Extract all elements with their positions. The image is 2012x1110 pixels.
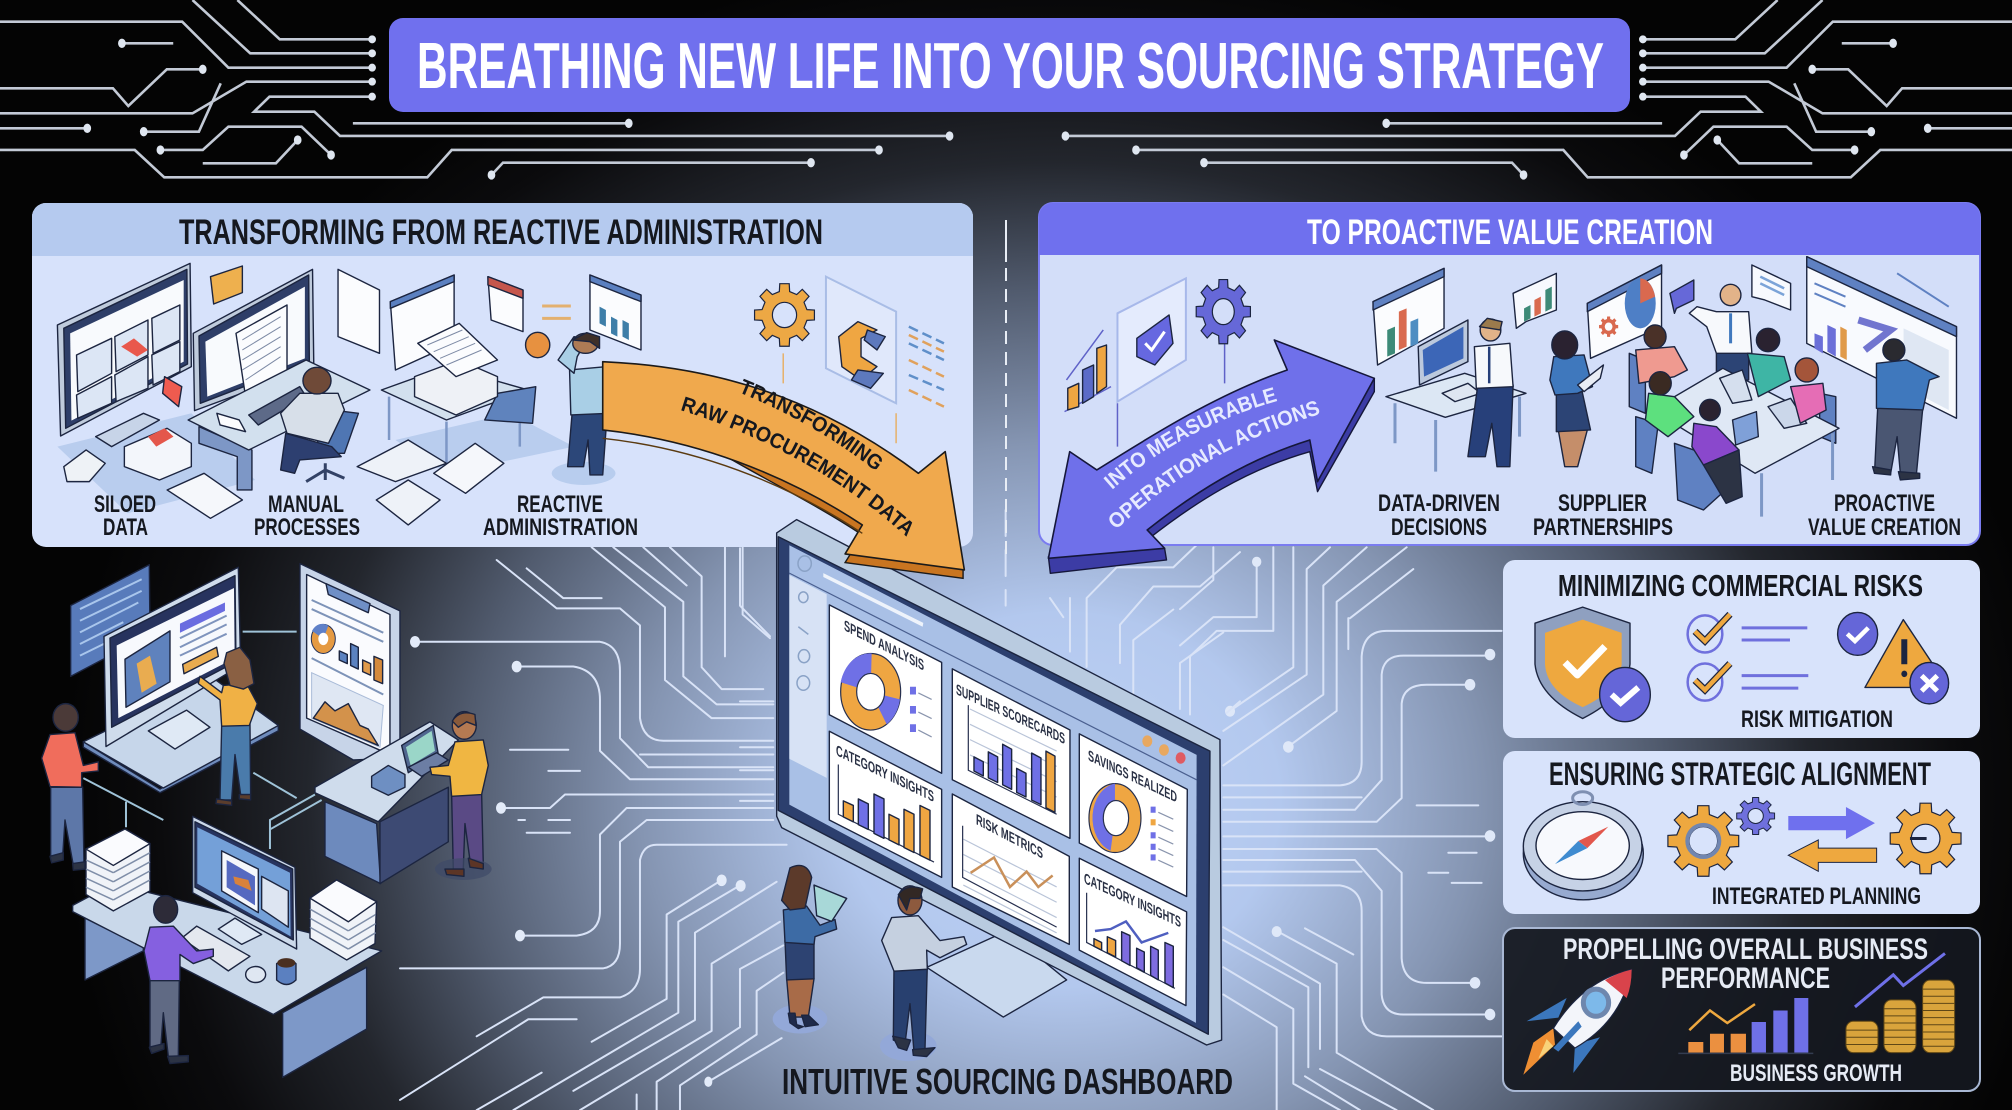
person: analyst: [1468, 318, 1513, 467]
purple gear: [1196, 280, 1250, 344]
arrow: raw procurement data: [602, 360, 966, 580]
growth arrow: [1855, 953, 1945, 1007]
pie chart screen: [1587, 265, 1662, 358]
arrow text line two: OPERATIONAL ACTIONS: [1109, 401, 1320, 527]
exchange arrows: [1788, 807, 1877, 871]
gears: [1668, 797, 1961, 876]
card: category insights 2: [1079, 858, 1187, 1006]
scene: analysts at workstations: [42, 564, 492, 1077]
title: savings realized: SAVINGS REALIZED: [1088, 748, 1177, 807]
centre dashed divider: [1005, 220, 1007, 262]
coin stacks: [1846, 980, 1955, 1053]
label: intuitive sourcing dashboard: INTUITIVE SOURCING DASHBOARD: [782, 1061, 1233, 1102]
compass: [1523, 792, 1643, 900]
card: spend analysis: [829, 605, 942, 773]
checklist card: [1117, 278, 1186, 402]
shield: [1535, 607, 1630, 719]
envelope: [210, 266, 242, 304]
person: presenter: [1689, 284, 1752, 382]
illustration: data driven team: [1065, 257, 1956, 517]
growth chart: [1065, 330, 1225, 447]
title: supplier scorecards: SUPPLIER SCORECARDS: [956, 682, 1065, 748]
panel header band: [1039, 203, 1980, 255]
analytics screen: [1373, 268, 1444, 365]
label: integrated planning: INTEGRATED PLANNING: [1712, 883, 1921, 910]
card titles: [836, 618, 1181, 931]
circuit traces: centre left: [400, 547, 787, 1110]
chart speech bubble: [1513, 273, 1556, 328]
person: woman with tablet: [773, 865, 847, 1034]
panel header band: [32, 203, 973, 256]
label: business growth: BUSINESS GROWTH: [1730, 1060, 1902, 1087]
panel: propelling overall business performance: [1503, 928, 1980, 1091]
person: man in yellow sweater: [430, 712, 492, 880]
person: man in purple at keyboard: [144, 896, 213, 1064]
loose document: [338, 269, 379, 353]
window controls: [1142, 735, 1186, 764]
warning triangle with badges: [1838, 612, 1949, 704]
arrow text line two: RAW PROCUREMENT DATA: [681, 396, 912, 537]
data tools: gear, card and magnet: [755, 277, 944, 443]
connector lines: [83, 632, 322, 849]
label: risk mitigation: RISK MITIGATION: [1741, 706, 1893, 733]
chat bubbles: [1670, 265, 1791, 313]
rocket: [1523, 969, 1632, 1075]
circuit traces: top left: [0, 0, 953, 180]
dashboard monitor: [777, 520, 1222, 1045]
manual monitor: [193, 269, 314, 411]
desk and worker: [188, 360, 370, 490]
right desk with laptop: [315, 722, 458, 884]
label: data-driven decisions: DECISIONS: [1391, 514, 1487, 541]
panel: proactive value creation: [1039, 203, 1980, 545]
person: supplier partner: [1550, 331, 1603, 467]
bar chart with trend: [1678, 998, 1813, 1053]
scattered papers: [64, 428, 504, 525]
label: proactive value creation: PROACTIVE: [1834, 490, 1935, 517]
title: risk metrics: RISK METRICS: [976, 812, 1043, 863]
desk top with monitor: [83, 567, 278, 793]
person: man in grey shirt: [880, 886, 967, 1061]
person: man in coral: [42, 704, 98, 870]
arrow text: INTO MEASURABLE: [1104, 387, 1278, 489]
analytics desk: [1386, 320, 1526, 472]
icons: rocket, chart and coins: [1523, 953, 1955, 1075]
label: reactive administration: ADMINISTRATION: [483, 514, 638, 541]
status lines: [542, 306, 571, 318]
label: data-driven decisions: DATA-DRIVEN: [1378, 490, 1500, 517]
circuit traces: behind dashboard: [740, 510, 1240, 801]
heading: PERFORMANCE: [1661, 962, 1830, 995]
clipboard of reports: [300, 564, 400, 760]
card: category insights: [829, 731, 942, 877]
lower desk with monitor and paper stacks: [73, 816, 382, 1077]
meeting table: [1629, 353, 1839, 517]
people seated around table: [1636, 325, 1826, 503]
card: risk metrics: [952, 794, 1069, 944]
panel: ensuring strategic alignment: [1503, 751, 1980, 914]
person: presenter at wall screen: [1873, 339, 1939, 480]
label: reactive administration: REACTIVE: [517, 491, 603, 518]
label: supplier partnerships: SUPPLIER: [1558, 490, 1647, 517]
floating text panel: [71, 565, 150, 676]
checklist: [1688, 614, 1808, 701]
circuit traces: centre right: [1180, 547, 1502, 1110]
illustration: office chaos: [57, 263, 944, 525]
chart card: [590, 275, 641, 350]
title: category insights 2: CATEGORY INSIGHTS: [1084, 871, 1181, 931]
label: siloed data: SILOED: [94, 491, 156, 518]
people viewing the dashboard: [773, 865, 967, 1061]
siloed monitor: [57, 263, 191, 447]
arrow: measurable operational actions: [1048, 339, 1376, 574]
monitor frame: [777, 520, 1222, 1045]
big strategy screen: [1807, 257, 1956, 418]
card: savings realized: [1079, 734, 1187, 897]
title: spend analysis: SPEND ANALYSIS: [844, 618, 924, 675]
icons: shield and checks: [1535, 607, 1949, 722]
clock icon: [526, 332, 550, 358]
circuit traces: top right: [1062, 0, 2012, 180]
monitor stand: [927, 931, 1067, 1017]
label: siloed data: DATA: [103, 514, 148, 541]
label: proactive value creation: VALUE CREATION: [1808, 514, 1961, 541]
card: supplier scorecards: [952, 669, 1070, 838]
heading: TO PROACTIVE VALUE CREATION: [1307, 213, 1713, 252]
calendar: [488, 277, 523, 332]
person: stressed administrator: [552, 333, 615, 485]
label: manual processes: PROCESSES: [254, 514, 360, 541]
panel: reactive administration: [32, 203, 973, 547]
label: manual processes: MANUAL: [268, 491, 344, 518]
title banner: [389, 18, 1630, 112]
heading: TRANSFORMING FROM REACTIVE ADMINISTRATION: [179, 213, 823, 252]
sidebar icons: [797, 556, 811, 690]
screen title bar: [823, 573, 923, 627]
icons: compass, gears and arrows: [1523, 792, 1961, 900]
desk of paper stacks: [381, 275, 536, 473]
arrow text: TRANSFORMING: [742, 378, 882, 470]
shield badge: [1600, 667, 1650, 722]
label: supplier partnerships: PARTNERSHIPS: [1533, 514, 1673, 541]
panel: minimizing commercial risks: [1503, 560, 1980, 738]
title: category insights: CATEGORY INSIGHTS: [836, 743, 934, 806]
person: woman in yellow: [198, 647, 257, 805]
